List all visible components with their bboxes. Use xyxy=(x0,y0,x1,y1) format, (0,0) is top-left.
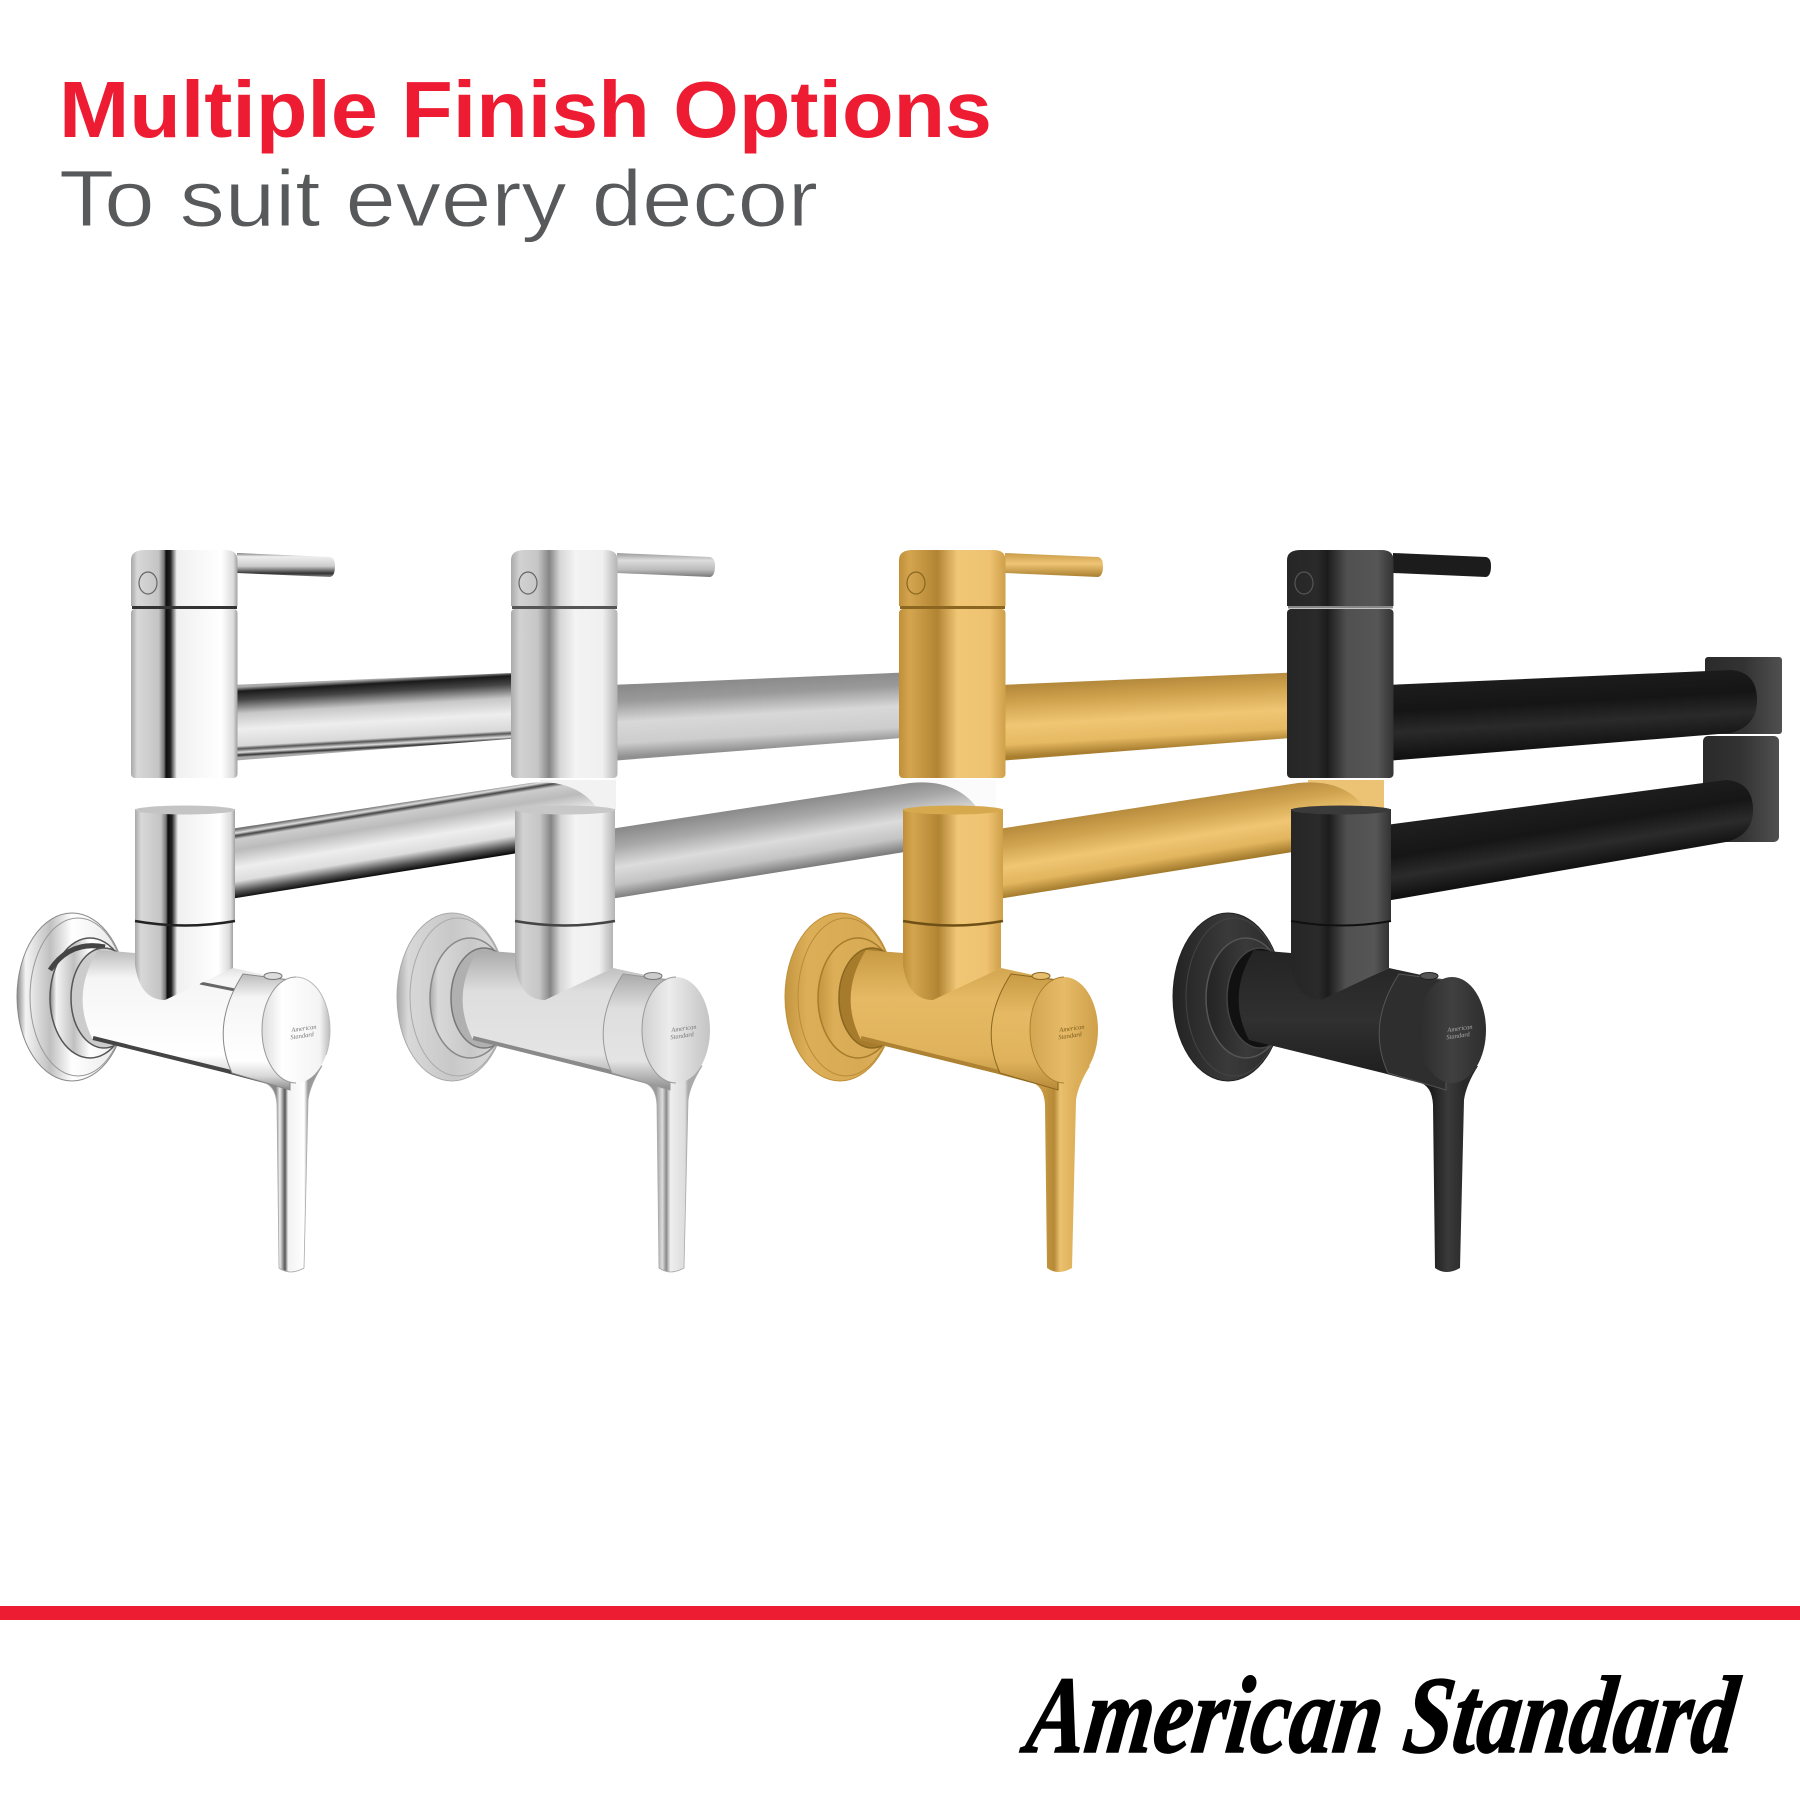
upper swing arm xyxy=(610,671,940,761)
wall mount xyxy=(1173,913,1293,1081)
title: Multiple Finish Options xyxy=(59,65,992,154)
upper swing arm xyxy=(1386,670,1757,761)
valve cap xyxy=(1418,977,1486,1083)
wall mount xyxy=(397,913,517,1081)
horizontal valve body xyxy=(83,950,290,1090)
lever handle xyxy=(642,1060,702,1272)
faucet: brushed gold xyxy=(785,550,1384,1272)
release button xyxy=(644,972,662,980)
lower swivel xyxy=(515,806,615,1000)
subtitle: To suit every decor xyxy=(59,154,818,243)
top swivel with lever xyxy=(131,550,335,778)
release button xyxy=(264,972,282,980)
lower swing arm xyxy=(610,780,996,899)
faucet: matte black xyxy=(1173,550,1782,1272)
cap logo: Standard xyxy=(1446,1031,1471,1041)
valve cap xyxy=(642,977,710,1083)
lower swing arm xyxy=(230,780,616,899)
top swivel with lever xyxy=(511,550,715,778)
valve collar xyxy=(603,974,670,1090)
release button xyxy=(1420,972,1438,980)
cap logo: Standard xyxy=(670,1031,695,1041)
red divider bar xyxy=(0,1606,1800,1620)
upper swing arm xyxy=(230,671,560,761)
release button xyxy=(1032,972,1050,980)
valve collar xyxy=(991,974,1058,1090)
top swivel with lever xyxy=(1287,550,1491,778)
lower swivel xyxy=(903,806,1003,1000)
lever handle xyxy=(1418,1060,1478,1272)
lower swivel xyxy=(1291,806,1391,1000)
faucet: brushed nickel xyxy=(397,550,996,1272)
cap logo: American xyxy=(1058,1024,1085,1034)
faucet: polished chrome xyxy=(17,550,616,1272)
wall mount xyxy=(785,913,905,1081)
cap logo: American xyxy=(670,1024,697,1034)
top swivel with lever xyxy=(899,550,1103,778)
wall mount xyxy=(17,913,137,1081)
lower swivel xyxy=(135,806,235,1000)
lower wall bracket xyxy=(1703,736,1779,842)
lever handle xyxy=(262,1060,322,1272)
horizontal valve body xyxy=(851,950,1058,1090)
cap logo: Standard xyxy=(290,1031,315,1041)
cap logo: American xyxy=(290,1024,317,1034)
cap logo: Standard xyxy=(1058,1031,1083,1041)
horizontal valve body xyxy=(1239,950,1446,1090)
lower swing arm xyxy=(1386,780,1753,901)
horizontal valve body xyxy=(463,950,670,1090)
cap logo: American xyxy=(1446,1024,1473,1034)
valve collar xyxy=(1379,974,1446,1090)
lever handle xyxy=(1030,1060,1090,1272)
valve cap xyxy=(1030,977,1098,1083)
upper wall bracket xyxy=(1705,657,1782,734)
valve collar xyxy=(223,974,290,1090)
upper swing arm xyxy=(998,671,1328,761)
valve cap xyxy=(262,977,330,1083)
lower swing arm xyxy=(998,780,1384,899)
